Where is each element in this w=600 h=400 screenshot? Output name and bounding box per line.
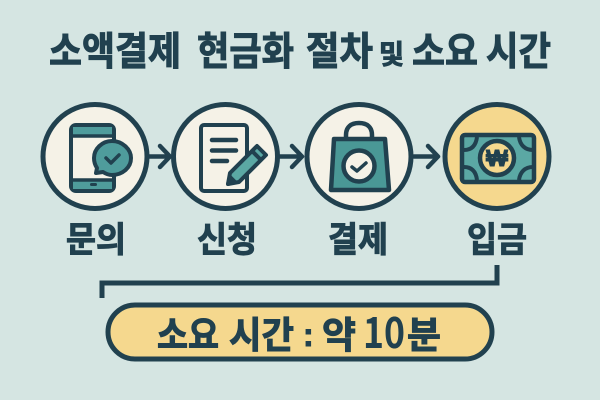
label: deposit: 입금	[467, 221, 527, 260]
title: 소액결제	[49, 31, 181, 74]
title: 시간	[486, 31, 551, 74]
icon: won banknote: ₩	[486, 145, 508, 171]
arrow: inquiry to application	[149, 146, 170, 167]
step: application icon	[174, 104, 278, 208]
arrow: application to payment	[280, 146, 302, 167]
time callout: :	[303, 317, 314, 353]
step: deposit icon	[445, 104, 549, 208]
icon: phone	[71, 125, 114, 191]
label: inquiry: 문의	[66, 221, 126, 260]
icon: document	[201, 125, 247, 191]
title: 절차	[306, 31, 373, 74]
time callout: 소요	[157, 315, 219, 356]
icon: pencil	[228, 146, 266, 184]
bracket	[102, 265, 497, 298]
icon: chat bubble with check	[94, 141, 131, 175]
step: payment icon	[307, 104, 411, 208]
title: 소요	[412, 31, 478, 74]
title: 및	[379, 40, 404, 70]
title: 현금화	[197, 31, 294, 74]
step: inquiry icon	[43, 104, 147, 208]
time callout: 시간	[229, 315, 294, 356]
label: application: 신청	[197, 221, 257, 260]
time callout: 10	[363, 300, 405, 361]
label: payment: 결제	[328, 221, 388, 260]
time callout	[108, 300, 492, 361]
arrow: payment to deposit	[414, 146, 438, 167]
icon: shopping bag	[331, 123, 389, 190]
time callout: 약	[322, 315, 356, 356]
time callout: 분	[407, 315, 441, 356]
title	[49, 31, 551, 74]
